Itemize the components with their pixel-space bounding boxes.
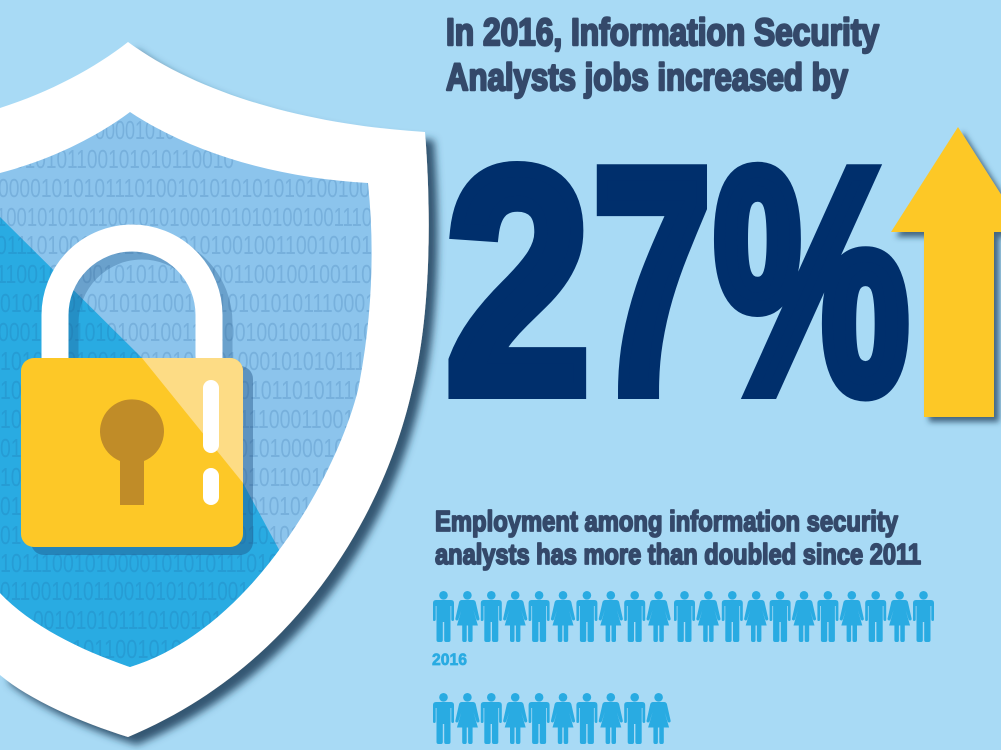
heading: In 2016, Information Security [446,12,879,54]
padlock icon [21,238,253,555]
shield inner panel with binary pattern: 0010101011101001010 [33,605,233,635]
padlock body [21,358,243,547]
shield inner panel with binary pattern [0,100,380,690]
shield inner panel with binary pattern: 01010101001010100101010101010010101 [0,520,376,550]
shield inner panel with binary pattern: 1011001010 [72,634,182,664]
employment statement: Employment among information security [435,506,898,538]
padlock highlight [142,358,243,483]
heading [446,12,879,99]
big 27 percent figure: 7 [593,104,711,459]
shield inner panel with binary pattern: 10101001010100100101001110001100100 [0,404,376,434]
shield outer white frame [0,42,429,737]
label 2016: 2016 [432,650,467,669]
up arrow [891,127,1001,417]
shield inner panel with binary pattern: 01100101011001010101100101 [0,576,270,606]
shield inner panel with binary pattern: 10100101001100101001010001010101110 [0,346,376,376]
employment statement [435,506,921,571]
shield inner panel with binary pattern: 1001010101100101010001010101001001110 [0,202,372,232]
big 27 percent figure: 2 [446,104,590,459]
padlock shackle [55,238,209,362]
shield inner panel with binary pattern: 00010101010100100110100100100110010 [0,317,374,347]
shield inner panel with binary pattern: 01110100101010001010100100110010101 [0,230,372,260]
shield inner panel with binary pattern: 11001010001010101001001100100100110 [0,259,372,289]
shield inner panel with binary pattern: 01010010100101010010101010101010010 [0,491,376,521]
shield inner panel with binary pattern: 00001010101110100101010101010100100 [0,173,370,203]
shield inner panel with binary pattern: 101110010100001010101110100 [0,548,290,578]
shield inner panel with binary pattern: 00001010 [95,115,175,145]
shield icon [0,42,429,737]
shield inner panel with binary pattern: 010101100101010110010 [14,144,234,174]
heading: Analysts jobs increased by [446,57,848,99]
people row 2016 [433,591,934,642]
shield inner panel with binary pattern: 10100101001010010101010101101011100 [0,375,376,405]
people row 2011 [433,693,671,744]
big 27 percent figure [446,104,909,459]
shield inner panel with binary pattern: 10100101010010101001010101100101010 [0,462,376,492]
padlock shadow [31,246,253,555]
white highlight pills [203,380,219,505]
big 27 percent figure: % [714,104,909,459]
keyhole [100,399,164,505]
shield inner panel with binary pattern: 01010101001010100100101010101110001 [0,288,376,318]
shield inner panel with binary pattern: 01010010100101001010100101000010110 [0,433,376,463]
